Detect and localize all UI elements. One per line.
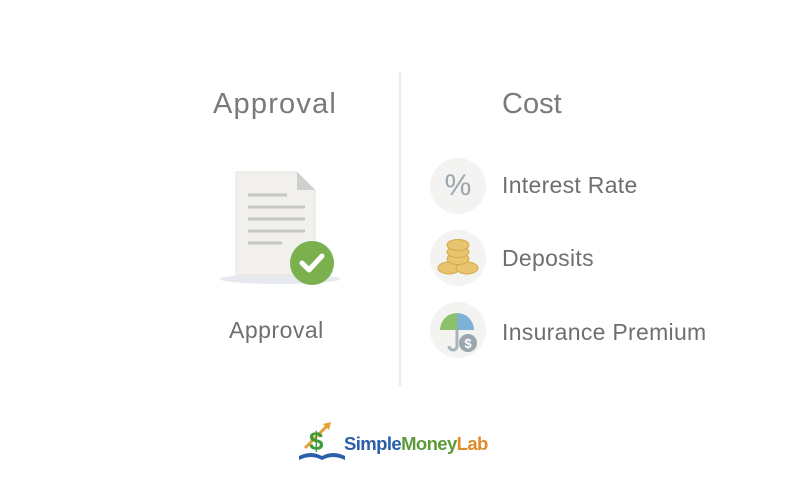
label: Approval: Approval bbox=[229, 317, 324, 343]
title: Cost: Cost bbox=[502, 88, 562, 120]
item: Insurance Premium: Insurance Premium bbox=[502, 319, 707, 345]
divider bbox=[399, 72, 401, 386]
icon: coins bbox=[430, 230, 486, 286]
item: Insurance Premium bbox=[430, 302, 707, 358]
icon: percent: % bbox=[445, 169, 471, 202]
item: Interest Rate: Interest Rate bbox=[502, 172, 638, 198]
item: Deposits: Deposits bbox=[502, 245, 594, 271]
title: Approval: Approval bbox=[213, 88, 337, 120]
item: Interest Rate bbox=[430, 158, 638, 214]
icon: document with check bbox=[220, 172, 340, 285]
icon: umbrella with dollar bbox=[430, 302, 486, 358]
logo: SimpleMoneyLab bbox=[299, 422, 488, 460]
icon: percent bbox=[430, 158, 486, 214]
logo: SimpleMoneyLab: $ bbox=[309, 426, 324, 456]
logo: SimpleMoneyLab: SimpleMoneyLab bbox=[344, 433, 488, 454]
item: Deposits bbox=[430, 230, 594, 286]
icon: umbrella with dollar: $ bbox=[464, 336, 472, 351]
